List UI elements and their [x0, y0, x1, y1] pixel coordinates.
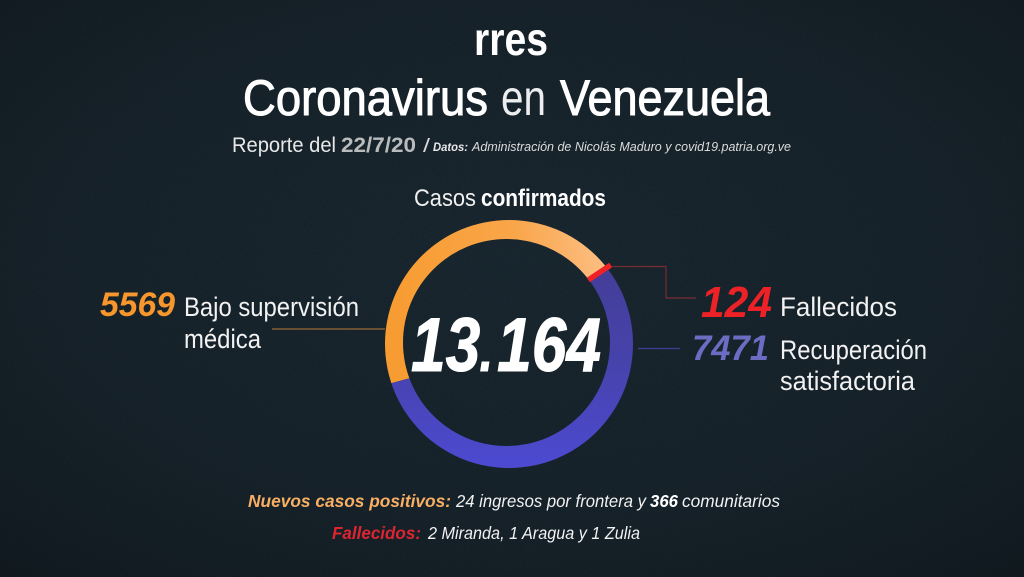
- logo: rres: rres: [474, 13, 548, 65]
- note: fallecidos por estado: [332, 523, 640, 543]
- note: nuevos casos positivos: 24 ingresos por frontera y: [455, 491, 647, 511]
- report date and data source: Administración de Nicolás Maduro y covid19.patria.org.ve: [471, 140, 791, 154]
- callout: recuperación satisfactoria: 7471: [692, 329, 769, 368]
- total cases: 13.: [411, 302, 493, 387]
- callout: bajo supervisión médica: médica: [184, 324, 262, 354]
- note: nuevos casos positivos: comunitarios: [682, 491, 780, 511]
- title: en: [501, 70, 546, 126]
- callout: fallecidos: 124: [701, 278, 772, 327]
- callout: bajo supervisión médica: 5569: [100, 286, 175, 324]
- callout: recuperación satisfactoria: satisfactoria: [780, 366, 916, 396]
- segment: bajo supervisión médica: [385, 220, 605, 384]
- heading: casos confirmados: Casos: [414, 185, 476, 212]
- callout: bajo supervisión médica: Bajo supervisión: [184, 292, 359, 322]
- note: fallecidos por estado: Fallecidos:: [332, 523, 421, 543]
- title: Venezuela: [560, 70, 770, 126]
- total cases: 164: [497, 302, 601, 387]
- heading: casos confirmados: [414, 185, 606, 212]
- report date and data source: 22/7/20: [341, 134, 416, 157]
- segment: fallecidos: [588, 265, 611, 280]
- report date and data source: Reporte del: [232, 134, 336, 157]
- callout: recuperación satisfactoria: [638, 329, 927, 396]
- title: [243, 70, 770, 126]
- note: fallecidos por estado: 2 Miranda, 1 Aragua y 1 Zulia: [427, 523, 640, 543]
- callout: recuperación satisfactoria: Recuperación: [780, 335, 927, 365]
- callout: bajo supervisión médica: [100, 286, 385, 354]
- callout: fallecidos: [611, 266, 897, 327]
- report date and data source: /: [423, 136, 431, 157]
- report date and data source: Datos:: [433, 140, 468, 154]
- title: Coronavirus: [243, 70, 488, 126]
- report date and data source: [232, 134, 791, 157]
- heading: casos confirmados: confirmados: [481, 185, 606, 212]
- note: nuevos casos positivos: Nuevos casos positivos:: [248, 491, 451, 511]
- donut chart: [385, 220, 633, 468]
- segment: recuperación satisfactoria: [391, 270, 633, 468]
- callout: fallecidos: Fallecidos: [780, 292, 897, 322]
- note: nuevos casos positivos: [248, 491, 780, 511]
- note: nuevos casos positivos: 366: [650, 491, 678, 511]
